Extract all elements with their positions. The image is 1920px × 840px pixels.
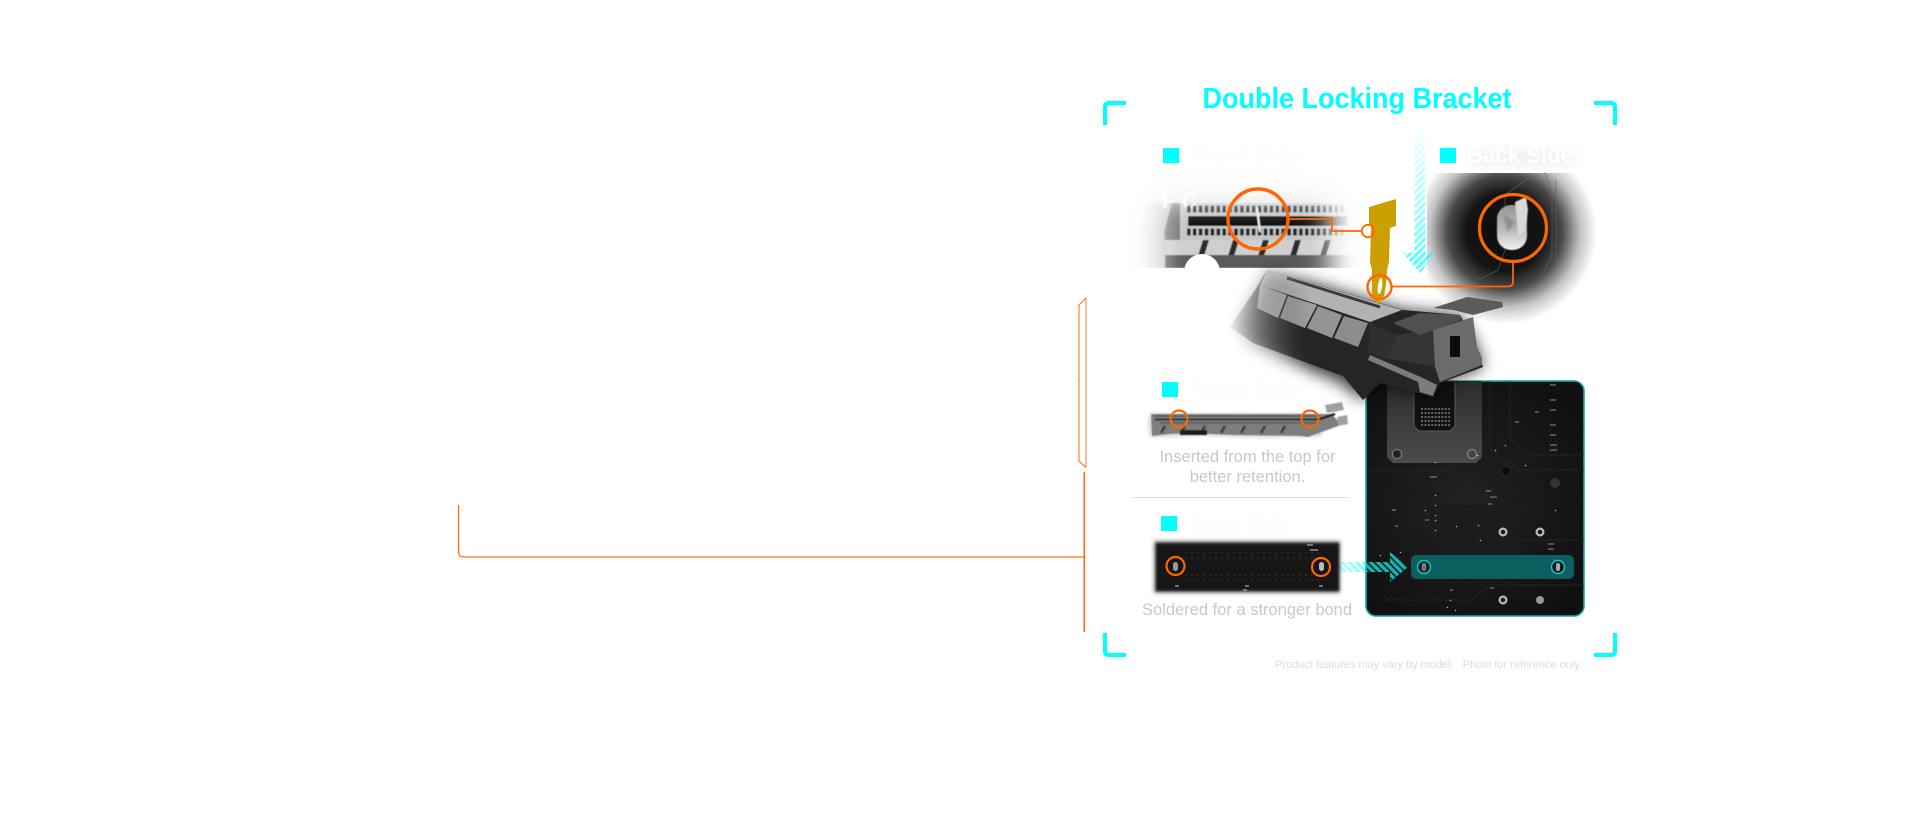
- photo: front side slot close-up: [1146, 194, 1352, 268]
- yellow bracket key: [1369, 199, 1396, 305]
- section marker and label: soldered side: Back Side: [1191, 511, 1291, 537]
- footnote: Product features may vary by model. Photo for reference only.: [1275, 659, 1582, 671]
- photo: front side slot close-up: F C: [1162, 188, 1198, 213]
- photo: PCB strip crop: [1154, 541, 1340, 593]
- orange wire outline: upper bracket edge: [1078, 298, 1086, 468]
- section marker and label: front side: Front Side: [1190, 142, 1300, 169]
- photo: back side PCB close-up: [1427, 172, 1610, 335]
- hatched downward arrow: [1403, 130, 1434, 273]
- white cut-out blob under front photo: [1184, 254, 1220, 290]
- photo: main PCIe slot with latch: [1230, 270, 1503, 400]
- caption: soldered: Soldered for a stronger bond: [1142, 601, 1352, 619]
- infographic canvas: [458, 87, 1617, 670]
- photo: small full-length slot: [1149, 402, 1348, 437]
- title: Double Locking Bracket: [1202, 83, 1512, 115]
- socket plate: [1387, 381, 1482, 463]
- hatched right arrow to strip: [1332, 552, 1408, 582]
- caption: inserted from the top: Inserted from the top for: [1159, 448, 1336, 466]
- panel: motherboard back photo: [1366, 381, 1584, 616]
- orange callout: front side to bracket: [1228, 189, 1374, 249]
- orange markers on small slot: [1170, 410, 1318, 428]
- highlighted solder strip: [1411, 555, 1574, 579]
- orange markers on PCB strip: [1166, 557, 1330, 576]
- section marker and label: insertion slot: Front Side: [1189, 377, 1299, 403]
- orange callout: back side to bracket: [1368, 194, 1546, 299]
- corner brackets: [1105, 103, 1615, 655]
- divider: [1133, 497, 1349, 498]
- caption: inserted from the top: better retention.: [1190, 468, 1305, 486]
- section marker and label: back side: Back Side: [1467, 142, 1573, 169]
- orange wire outline: vertical rail and long horizontal leader: [459, 472, 1084, 632]
